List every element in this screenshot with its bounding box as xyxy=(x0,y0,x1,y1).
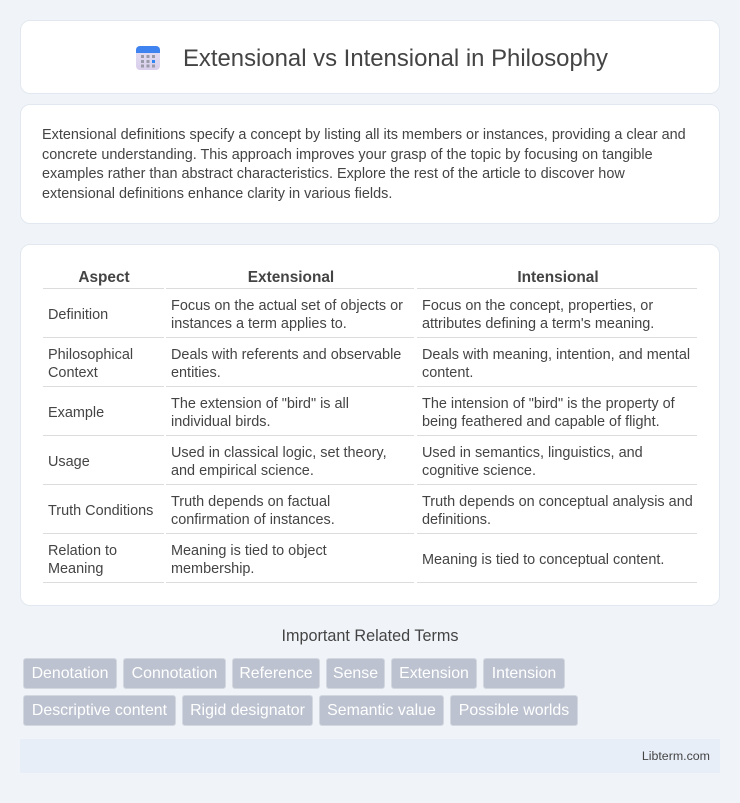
row: Truth Conditions: Truth depends on factual xyxy=(171,494,330,510)
title: Extensional vs Intensional in Philosophy xyxy=(183,45,608,72)
row: Definition xyxy=(48,298,654,332)
row: Usage xyxy=(48,445,643,479)
row: Usage: Usage xyxy=(48,454,90,470)
row: Philosophical Context: Deals with referents and observable xyxy=(171,347,401,363)
row: Relation to Meaning: Meaning is tied to conceptual content. xyxy=(422,552,664,568)
related terms tags: Denotation xyxy=(32,665,108,682)
row: Definition: Focus on the actual set of objects or xyxy=(171,298,403,314)
row: Truth Conditions: Truth depends on conceptual analysis and xyxy=(422,494,693,510)
row: Definition: Definition xyxy=(48,307,108,323)
intro text: Extensional definitions specify a concept by listing all its members or instances, providing a clear and xyxy=(42,127,686,143)
table header: Intensional xyxy=(517,269,599,286)
row: Philosophical Context: Philosophical xyxy=(48,347,133,363)
intro text: extensional definitions enhance clarity in various fields. xyxy=(42,186,392,202)
intro text: examples rather than abstract characteristics. Explore the rest of the article to discover how xyxy=(42,166,625,182)
row: Relation to Meaning: membership. xyxy=(171,561,254,577)
related terms tags xyxy=(23,658,578,726)
row: Example: Example xyxy=(48,405,104,421)
footer xyxy=(20,739,720,773)
related terms tags: Rigid designator xyxy=(190,702,305,719)
icon: calendar xyxy=(136,46,160,70)
related terms tags: Sense xyxy=(333,665,378,682)
row: Truth Conditions xyxy=(48,494,693,528)
related terms tags: Possible worlds xyxy=(459,702,569,719)
row: Definition: instances a term applies to. xyxy=(171,316,347,332)
row: Usage: Used in semantics, linguistics, and xyxy=(422,445,643,461)
related terms tags: Reference xyxy=(239,665,313,682)
row: Definition: Focus on the concept, properties, or xyxy=(422,298,653,314)
row: Philosophical Context: content. xyxy=(422,365,473,381)
intro panel xyxy=(20,104,720,224)
related terms tags: Semantic value xyxy=(327,702,436,719)
title card xyxy=(20,20,720,94)
row: Philosophical Context: Context xyxy=(48,365,98,381)
row: Philosophical Context: entities. xyxy=(171,365,221,381)
row: Truth Conditions: Truth Conditions xyxy=(48,503,153,519)
row: Relation to Meaning: Meaning is tied to object xyxy=(171,543,327,559)
row: Example: The intension of "bird" is the property of xyxy=(422,396,675,412)
comparison table panel xyxy=(20,244,720,606)
related terms tags: Connotation xyxy=(132,665,217,682)
row: Relation to Meaning: Relation to xyxy=(48,543,117,559)
related terms heading: Important Related Terms xyxy=(282,627,458,645)
table header xyxy=(78,269,599,286)
table header: Aspect xyxy=(78,269,130,286)
footer credit: Libterm.com xyxy=(642,749,710,763)
related terms tags: Extension xyxy=(399,665,469,682)
table header: Extensional xyxy=(248,269,334,286)
row: Usage: cognitive science. xyxy=(422,463,536,479)
row: Truth Conditions: confirmation of instances. xyxy=(171,512,335,528)
row: Relation to Meaning: Meaning xyxy=(48,561,103,577)
row: Example: being feathered and capable of flight. xyxy=(422,414,660,430)
row: Usage: Used in classical logic, set theory, xyxy=(171,445,387,461)
related terms tags: Descriptive content xyxy=(32,702,167,719)
row: Truth Conditions: definitions. xyxy=(422,512,491,528)
row: Philosophical Context: Deals with meaning, intention, and mental xyxy=(422,347,690,363)
intro text: concrete understanding. This approach improves your grasp of the topic by focusing on tangible xyxy=(42,146,653,162)
row: Example: individual birds. xyxy=(171,414,271,430)
row: Relation to Meaning xyxy=(48,543,664,577)
row: Example xyxy=(48,396,675,430)
row: Definition: attributes defining a term's meaning. xyxy=(422,316,654,332)
row: Philosophical Context xyxy=(48,347,690,381)
row: Usage: and empirical science. xyxy=(171,463,314,479)
intro text xyxy=(42,127,686,202)
related terms tags: Intension xyxy=(492,665,556,682)
row: Example: The extension of "bird" is all xyxy=(171,396,349,412)
